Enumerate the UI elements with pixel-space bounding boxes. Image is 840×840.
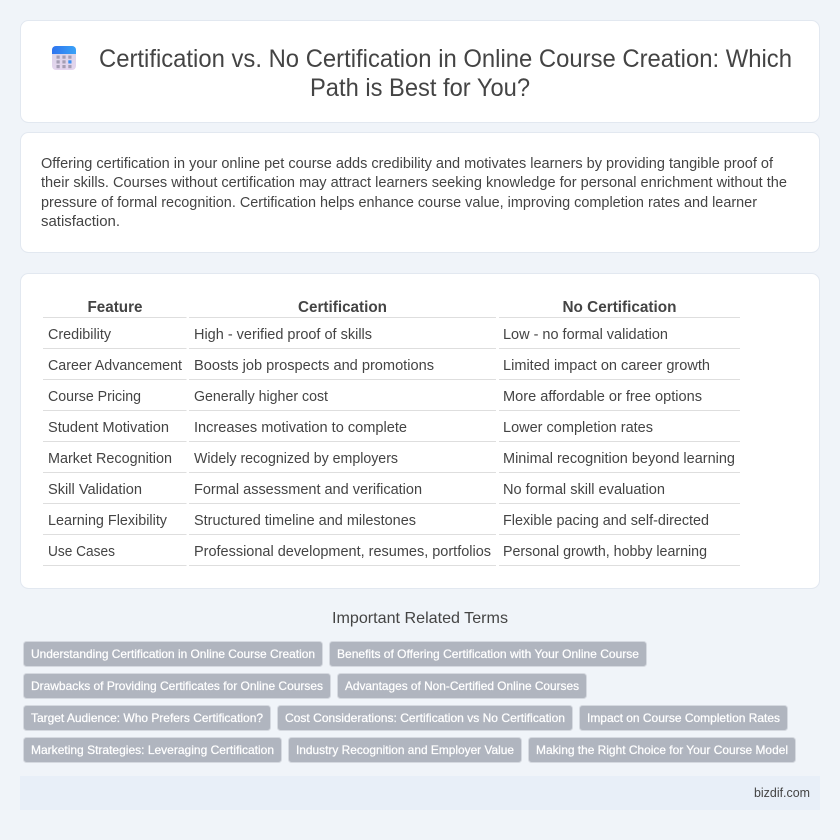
- table row lines: [43, 318, 740, 566]
- tag: Advantages of Non-Certified Online Courses: [345, 679, 579, 693]
- table row: Learning Flexibility: Learning Flexibility: [48, 513, 168, 529]
- tag: [24, 674, 330, 698]
- table row: Skill Validation: Skill Validation: [48, 482, 142, 498]
- text block: introduction: Offering certification in your online pet course adds credibility and motivates learners by providing tangible proof of: [41, 156, 774, 172]
- title: Path is Best for You?: [310, 74, 530, 102]
- tag: Marketing Strategies: Leveraging Certification: [31, 743, 274, 757]
- panel: title header: [20, 20, 820, 122]
- table header: [88, 299, 676, 316]
- table header: No Certification: [562, 299, 676, 316]
- table row: Course Pricing: More affordable or free options: [503, 389, 702, 405]
- table row: Use Cases: Professional development, resumes, portfolios: [194, 544, 491, 560]
- icon: calendar: [52, 46, 76, 70]
- heading: important related terms: Important Related Terms: [332, 610, 508, 627]
- tag: [24, 738, 282, 762]
- table row: Market Recognition: Market Recognition: [48, 451, 172, 467]
- tag: Benefits of Offering Certification with Your Online Course: [337, 647, 639, 661]
- table row: Use Cases: Personal growth, hobby learning: [503, 544, 707, 560]
- panel: related term tags: [24, 642, 796, 762]
- table row: Student Motivation: [48, 420, 653, 436]
- panel: comparison table: [20, 274, 820, 588]
- tag: [288, 738, 522, 762]
- text block: introduction: satisfaction.: [41, 214, 120, 230]
- text block: introduction: their skills. Courses without certification may attract learners seeking knowledge for personal enrichment without the: [41, 175, 787, 191]
- table row: Skill Validation: Formal assessment and verification: [194, 482, 422, 498]
- text block: introduction: pressure of formal recognition. Certification helps enhance course value, improving completion rates and learner: [41, 195, 757, 211]
- footer: [20, 776, 820, 810]
- tag: [24, 706, 270, 730]
- table row: Market Recognition: Minimal recognition beyond learning: [503, 451, 735, 467]
- title: Certification vs. No Certification in Online Course Creation: Which: [99, 45, 792, 73]
- table row: Skill Validation: No formal skill evaluation: [503, 482, 665, 498]
- table row: Market Recognition: [48, 451, 735, 467]
- tag: [580, 706, 788, 730]
- tag: Drawbacks of Providing Certificates for Online Courses: [31, 679, 323, 693]
- tag: Cost Considerations: Certification vs No Certification: [285, 711, 565, 725]
- table row: Career Advancement: [48, 358, 710, 374]
- tag: Target Audience: Who Prefers Certification?: [31, 711, 263, 725]
- tag: [330, 642, 646, 666]
- table row: Career Advancement: Limited impact on career growth: [503, 358, 710, 374]
- table row: Career Advancement: Boosts job prospects and promotions: [194, 358, 434, 374]
- table row: Learning Flexibility: [48, 513, 709, 529]
- table row: Market Recognition: Widely recognized by employers: [194, 451, 398, 467]
- table row: Course Pricing: Course Pricing: [48, 389, 141, 405]
- table row: Learning Flexibility: Flexible pacing and self-directed: [503, 513, 709, 529]
- table header: Certification: [298, 299, 387, 316]
- tag: [24, 642, 322, 666]
- tag: Impact on Course Completion Rates: [587, 711, 780, 725]
- footer source text: bizdif.com: [754, 785, 810, 800]
- table row: Credibility: Low - no formal validation: [503, 327, 668, 343]
- table row: Credibility: [48, 327, 668, 343]
- table row: Use Cases: [48, 544, 707, 560]
- tag: Industry Recognition and Employer Value: [296, 743, 514, 757]
- table row: Course Pricing: [48, 389, 702, 405]
- tag: [528, 738, 796, 762]
- panel: introduction text: [20, 132, 820, 252]
- table row: Credibility: Credibility: [48, 327, 112, 343]
- tag: [278, 706, 572, 730]
- table row: Student Motivation: Student Motivation: [48, 420, 169, 436]
- table row: Credibility: High - verified proof of skills: [194, 327, 372, 343]
- table row: Learning Flexibility: Structured timeline and milestones: [194, 513, 416, 529]
- table row: Student Motivation: Lower completion rates: [503, 420, 653, 436]
- table header: Feature: [88, 299, 143, 316]
- table row: Skill Validation: [48, 482, 665, 498]
- tag: Making the Right Choice for Your Course Model: [536, 743, 788, 757]
- tag: Understanding Certification in Online Course Creation: [31, 647, 315, 661]
- table row: Use Cases: Use Cases: [48, 544, 115, 560]
- tag: [338, 674, 586, 698]
- title: [99, 45, 792, 102]
- text block: introduction: [41, 156, 787, 230]
- table row: Career Advancement: Career Advancement: [48, 358, 182, 374]
- table row: Course Pricing: Generally higher cost: [194, 389, 328, 405]
- table row: Student Motivation: Increases motivation to complete: [194, 420, 407, 436]
